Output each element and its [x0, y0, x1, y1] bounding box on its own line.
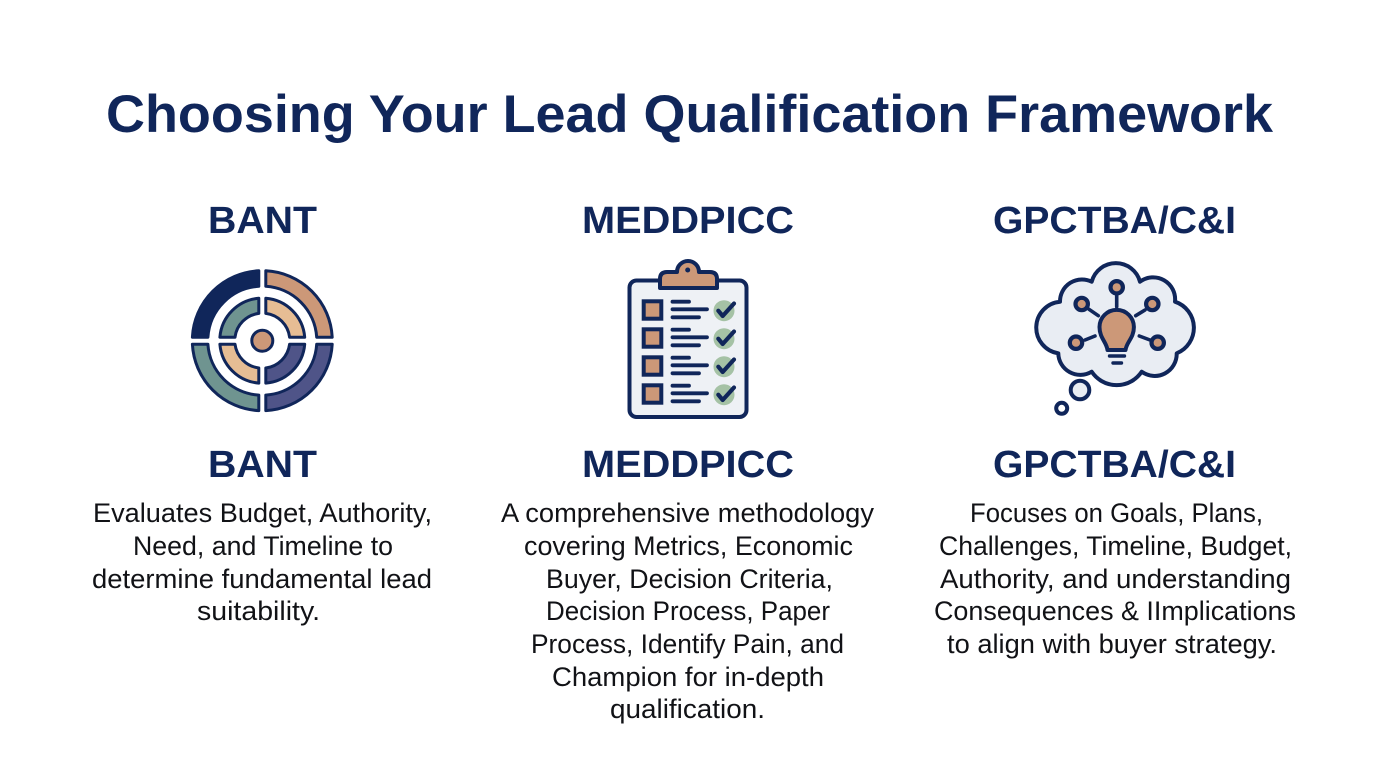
panel: MEDDPICC [501, 200, 875, 724]
text block: GPCTBA/C&I description [934, 498, 1296, 659]
text block: MEDDPICC description: Buyer, Decision Criteria, [546, 564, 833, 594]
text block: GPCTBA/C&I description: Consequences & IImplications [934, 596, 1296, 626]
text block: MEDDPICC description: A comprehensive methodology [501, 498, 875, 528]
text block: BANT description: determine fundamental lead [92, 564, 432, 594]
text block: GPCTBA/C&I description: Challenges, Timeline, Budget, [939, 531, 1292, 561]
text block: MEDDPICC description: qualification. [610, 694, 765, 724]
heading: GPCTBA/C&I top: GPCTBA/C&I [993, 200, 1236, 242]
text block: MEDDPICC description: covering Metrics, Economic [524, 531, 853, 561]
heading: MEDDPICC lower: MEDDPICC [582, 444, 794, 486]
text block: MEDDPICC description [501, 498, 875, 724]
icon: segmented target [192, 271, 332, 411]
heading: BANT lower: BANT [208, 444, 317, 486]
text block: GPCTBA/C&I description: Focuses on Goals, Plans, [970, 498, 1263, 528]
panel: GPCTBA/C&I [934, 200, 1296, 659]
heading: MEDDPICC top: MEDDPICC [582, 200, 794, 242]
text block: MEDDPICC description: Decision Process, Paper [546, 596, 830, 626]
text block: MEDDPICC description: Champion for in-depth [552, 662, 824, 692]
panel: BANT [92, 200, 432, 626]
heading: BANT top: BANT [208, 200, 317, 242]
icon: thought cloud with lightbulb [1036, 263, 1194, 414]
text block: BANT description: Need, and Timeline to [133, 531, 393, 561]
text block: BANT description: Evaluates Budget, Authority, [93, 498, 432, 528]
title: Choosing Your Lead Qualification Framework [106, 85, 1274, 144]
text block: GPCTBA/C&I description: Authority, and understanding [940, 564, 1291, 594]
text block: BANT description: suitability. [197, 596, 320, 626]
text block: GPCTBA/C&I description: to align with buyer strategy. [947, 629, 1277, 659]
text block: BANT description [92, 498, 432, 626]
text block: MEDDPICC description: Process, Identify Pain, and [531, 629, 844, 659]
icon: clipboard checklist [630, 261, 746, 417]
heading: GPCTBA/C&I lower: GPCTBA/C&I [993, 444, 1236, 486]
